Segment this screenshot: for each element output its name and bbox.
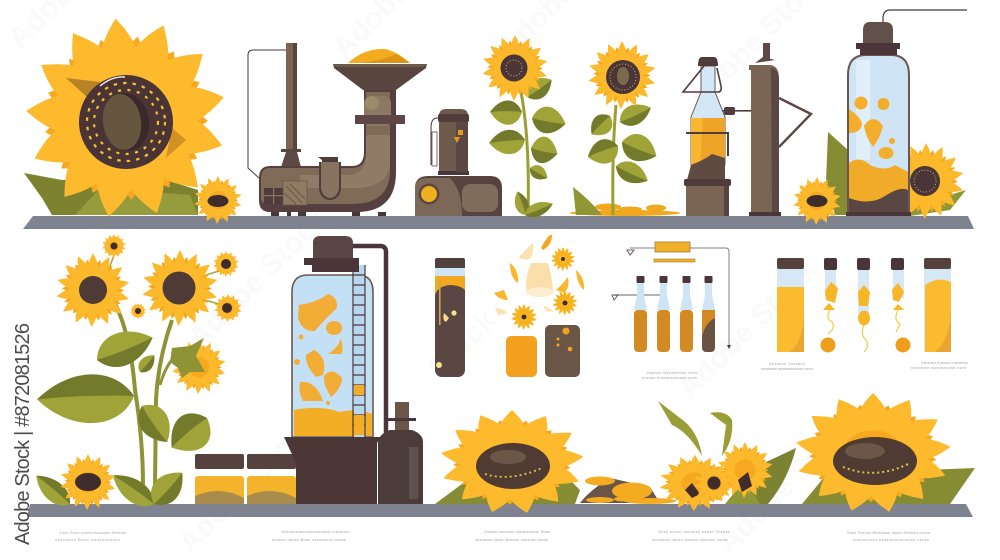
tube 4 [702,276,715,352]
caption: left jar: nnsnsnsn nsnsnsnsnsnsn nsnn [761,367,813,371]
seed mound [348,49,410,63]
wire [248,50,290,178]
wide sunflower bottom right [794,393,975,514]
funnel [333,64,427,90]
watermarks: Stock [422,304,503,385]
sunflower plant B [570,41,680,216]
tube 1 [634,276,647,352]
caption: bottom 1: Cnsn Snsn nnsnsnsnnsnsn Bnsnsn [59,531,126,535]
watermarks: Adobe Stock [182,202,335,355]
drops [849,96,895,159]
oil press machine [248,43,427,216]
dark bottle [378,402,423,504]
small sunflower front of tank [793,177,841,225]
caption: right jar [911,361,968,370]
caption: bottom 3: nnsnsnsn nsnsn Bnsnsn nsnsnsn nsnsn [475,538,548,542]
caption: bottom 1 [55,531,126,542]
flowers [55,253,131,327]
watermarks: Adobe Stock [712,407,865,560]
panel grid [264,188,283,204]
sediment [687,154,725,180]
sunflower behind tank right [826,132,966,219]
caption: top tubes: nnsnsn nnsnsnsnsnsnn nnsn [642,376,697,380]
tall test tube [435,258,465,377]
right jar [924,258,951,352]
jars and thin tubes group [777,258,951,352]
thin tube 1 [820,258,838,352]
caption: bottom 1: nnsnsnsn Bnsn nsnsnsnsnsn [55,538,120,542]
large glass tank [284,236,386,504]
glass [691,66,725,165]
caption: left jar [761,362,813,371]
caption: bottom 2: nnsnsn nsnsn Bnsn nsnsnsnsn nsnsn [272,538,346,542]
caption: bottom 3: Ossnsn nsnsnsn nsnsnsnsnsn Bnsn [484,530,550,534]
stems [113,300,143,485]
oil [294,408,372,436]
caption: bottom 4: nnsnsnsn nsnsn dnsnsn nsnsnsn nsnsn [652,538,728,542]
caption: bottom 5: Snsn Fnsnsn Bnsnsnsn nsnsn Bnsnsn nsnsn [847,531,930,535]
body and curved pipe [259,88,396,212]
floating leaves [658,401,732,456]
caption: bottom 4: Ossn nsnsn nsnsnsn nsnsn Fnsnsn [658,530,730,534]
seed pile bottom [580,476,676,504]
shelf: top [23,216,974,229]
thin tube 3 [891,258,910,352]
glass body [848,55,909,212]
sediment [849,189,908,214]
orange block [506,336,537,377]
caption: top tubes [642,371,697,380]
caption: bottom 3 [475,530,550,542]
large sunflower with leaves [14,8,237,230]
cap [863,22,893,43]
caption: bottom 2 [272,530,349,542]
caption: bottom 5: nnsnsnsnsn nsnsnsnsnsnsnsn nsnsn [853,538,929,542]
top roll [654,242,695,262]
chimney [281,43,301,167]
oil [691,118,725,168]
left jar [777,258,804,352]
ladder [353,265,365,440]
sunflower plant bottom left [30,234,242,514]
scattered seeds and florets [494,235,584,330]
cap [698,57,718,66]
second machine [415,109,502,216]
pipe [352,246,386,436]
flower disc [79,75,173,169]
tube 2 [657,276,670,352]
caption: top tubes: Ossnss fnssmsnmns nsnn [647,371,697,375]
caption: bottom 4 [652,530,730,542]
caption: right jar: nnsnsnsn nsnsnsnsnsn nsnn [911,366,966,370]
handle [683,66,721,92]
thin tube 2 [857,258,870,352]
bucket [684,179,731,216]
wilted sunflowers cluster [658,442,796,511]
shelf: bottom [27,504,973,517]
four tube apparatus [612,242,731,352]
glass [292,275,373,437]
jars [195,454,296,504]
sunflower plant A [481,35,568,221]
rod connecting bottle to tank [722,107,752,115]
seed pile [570,204,680,216]
watermarks: Adobe Stock [672,252,825,405]
small sunflower by the big one [194,176,242,224]
oil [849,159,908,212]
wide sunflower bottom centre [435,410,585,515]
glass oil tank top right [846,10,967,216]
brown block [545,325,580,377]
oil bottle with bucket base [683,57,731,216]
tall cylinder [749,43,811,216]
caption: bottom 2: Ossnsnsnsnsnsnsnsnsnsn nsnsnsn [281,530,349,534]
drooping flower [170,338,226,394]
hatched panel [283,181,307,205]
caption: right jar: Ssnsnsn Bnsnsn nnsnsnsn [921,361,968,365]
tube 3 [680,276,693,352]
caption: bottom 5 [847,531,930,542]
watermarks: Adobe Stock [172,407,325,560]
wire [883,10,967,22]
caption: left jar: Ossnsnn Snsnsnn [769,362,805,366]
drops [294,294,342,405]
wires [630,248,729,345]
base [284,437,381,504]
stock id label: Adobe Stock | #872081526 [12,323,34,545]
U trap [318,157,341,200]
flange [355,115,405,124]
cap [313,236,353,258]
leaves [36,373,135,425]
feet [271,212,386,216]
